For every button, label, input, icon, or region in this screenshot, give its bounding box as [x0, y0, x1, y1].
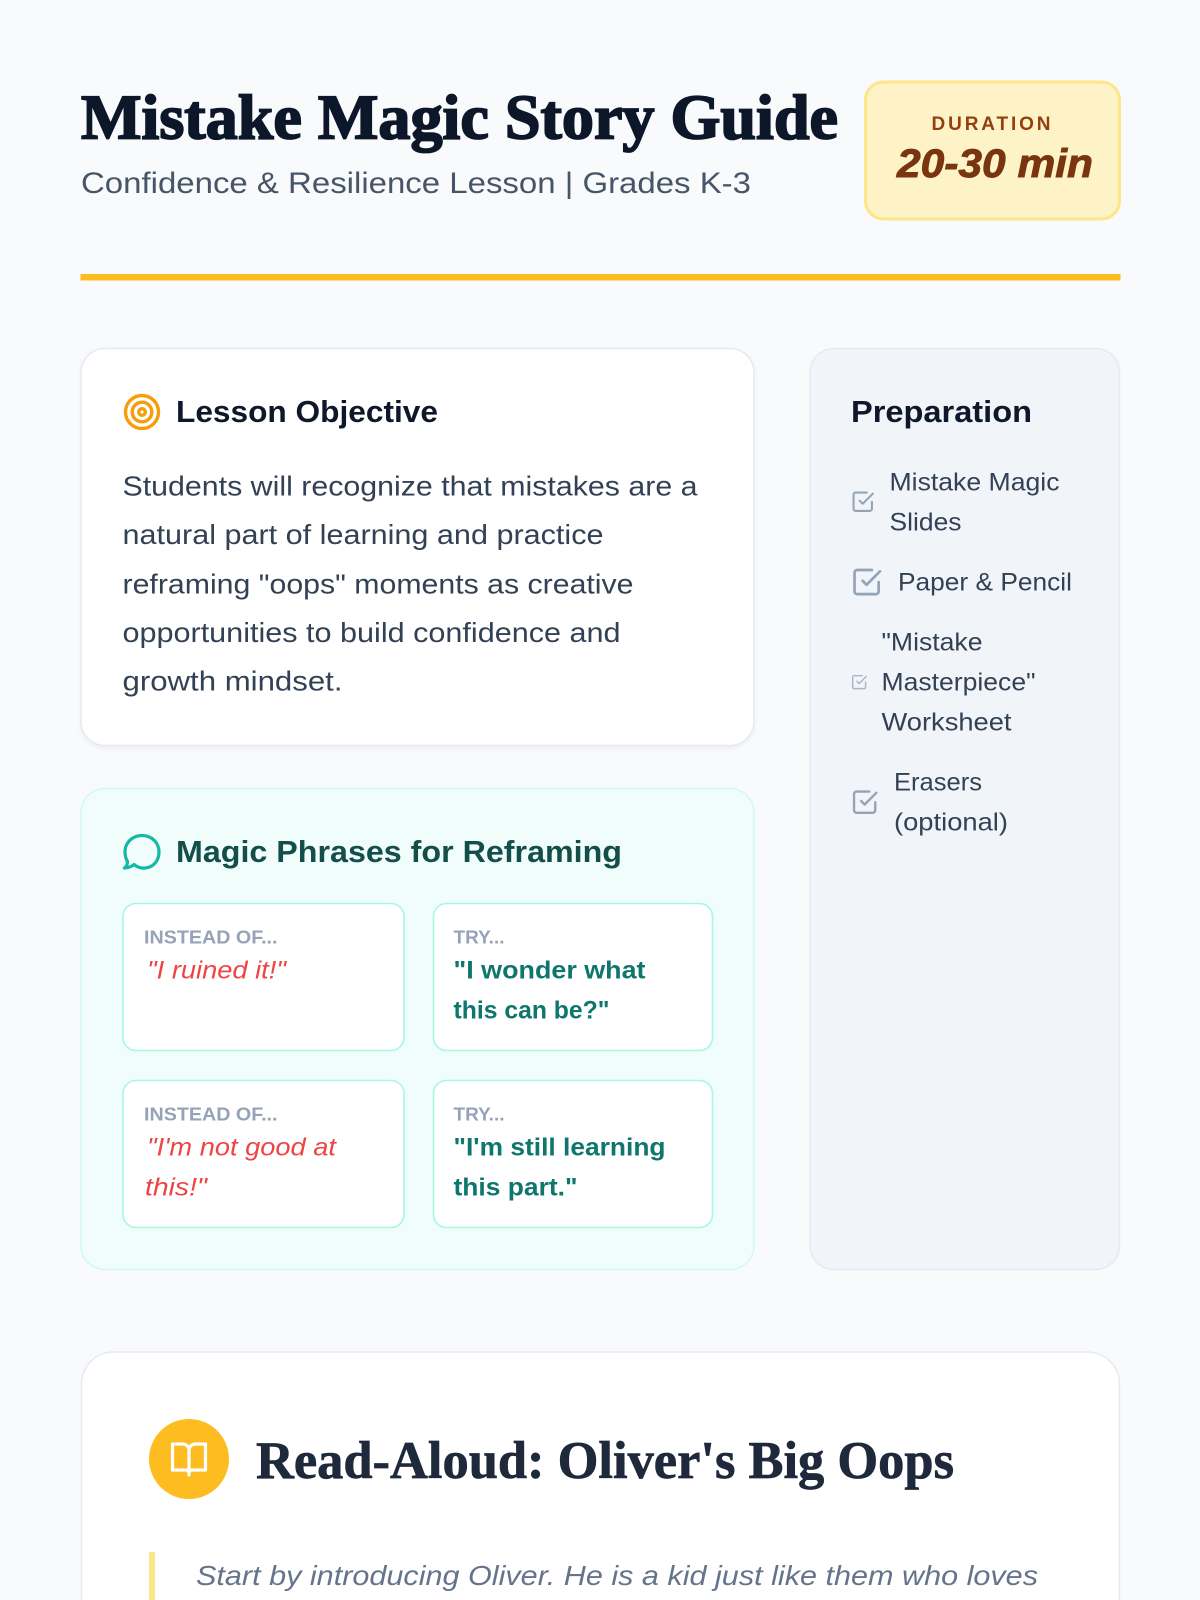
objective text: opportunities to build confidence and [122, 617, 620, 648]
intro text: Start by introducing Oliver. He is a kid just like them who loves [196, 1560, 1038, 1591]
icon: open book [149, 1419, 229, 1499]
item: erasers [854, 768, 1008, 836]
phrase card: instead of 1: "I ruined it!" [147, 956, 287, 984]
item: slides: Mistake Magic [890, 468, 1060, 496]
phrase card: instead of 2: "I'm not good at [147, 1134, 337, 1162]
phrase card: try 2: TRY... [454, 1104, 504, 1124]
panel: magic phrases [81, 788, 754, 1270]
title: Mistake Magic Story Guide [81, 82, 838, 152]
phrase card: try 1: TRY... [454, 928, 504, 948]
icon: speech bubble [124, 836, 159, 868]
phrase card: try 1: this can be?" [454, 996, 610, 1024]
header [81, 82, 1120, 219]
panel: preparation [810, 348, 1120, 1270]
objective text: natural part of learning and practice [122, 519, 604, 550]
heading: preparation: Preparation [851, 394, 1032, 429]
accent bar [149, 1552, 155, 1600]
duration badge [866, 82, 1120, 219]
panel: lesson objective [81, 348, 754, 746]
phrase card: instead of 1 [123, 904, 404, 1050]
phrase card: try 1: "I wonder what [454, 956, 646, 984]
item: worksheet: Worksheet [882, 708, 1012, 736]
item: paper and pencil: Paper & Pencil [898, 568, 1072, 596]
item: worksheet [853, 628, 1036, 736]
subtitle: Confidence & Resilience Lesson | Grades K-3 [81, 167, 751, 200]
duration badge: DURATION [932, 114, 1050, 135]
phrase card: try 2: this part." [454, 1174, 578, 1202]
objective text: reframing "oops" moments as creative [122, 568, 634, 600]
phrase card: instead of 2: this!" [145, 1174, 208, 1202]
heading: lesson objective: Lesson Objective [176, 394, 438, 429]
icon: target [126, 396, 158, 428]
objective text: Students will recognize that mistakes are a [122, 470, 698, 502]
item: erasers: Erasers [894, 768, 982, 796]
phrase card: try 1 [434, 904, 712, 1050]
item: worksheet: Masterpiece" [882, 668, 1036, 696]
panel: read-aloud [82, 1352, 1120, 1600]
phrase card: instead of 2: INSTEAD OF... [144, 1104, 278, 1124]
item: worksheet: "Mistake [882, 628, 982, 656]
phrase card: try 2 [434, 1080, 712, 1228]
item: slides [854, 468, 1060, 536]
objective text: growth mindset. [122, 666, 342, 696]
heading: read-aloud: Read-Aloud: Oliver's Big Oops [256, 1432, 954, 1490]
heading: magic phrases: Magic Phrases for Reframing [176, 834, 622, 869]
objective text [122, 470, 698, 696]
duration badge: 20-30 min [896, 142, 1093, 186]
phrase card: try 2: "I'm still learning [454, 1134, 666, 1162]
phrase card: instead of 1: INSTEAD OF... [144, 928, 278, 948]
item: erasers: (optional) [894, 808, 1008, 836]
item: slides: Slides [890, 508, 962, 536]
phrase card: instead of 2 [123, 1080, 404, 1228]
